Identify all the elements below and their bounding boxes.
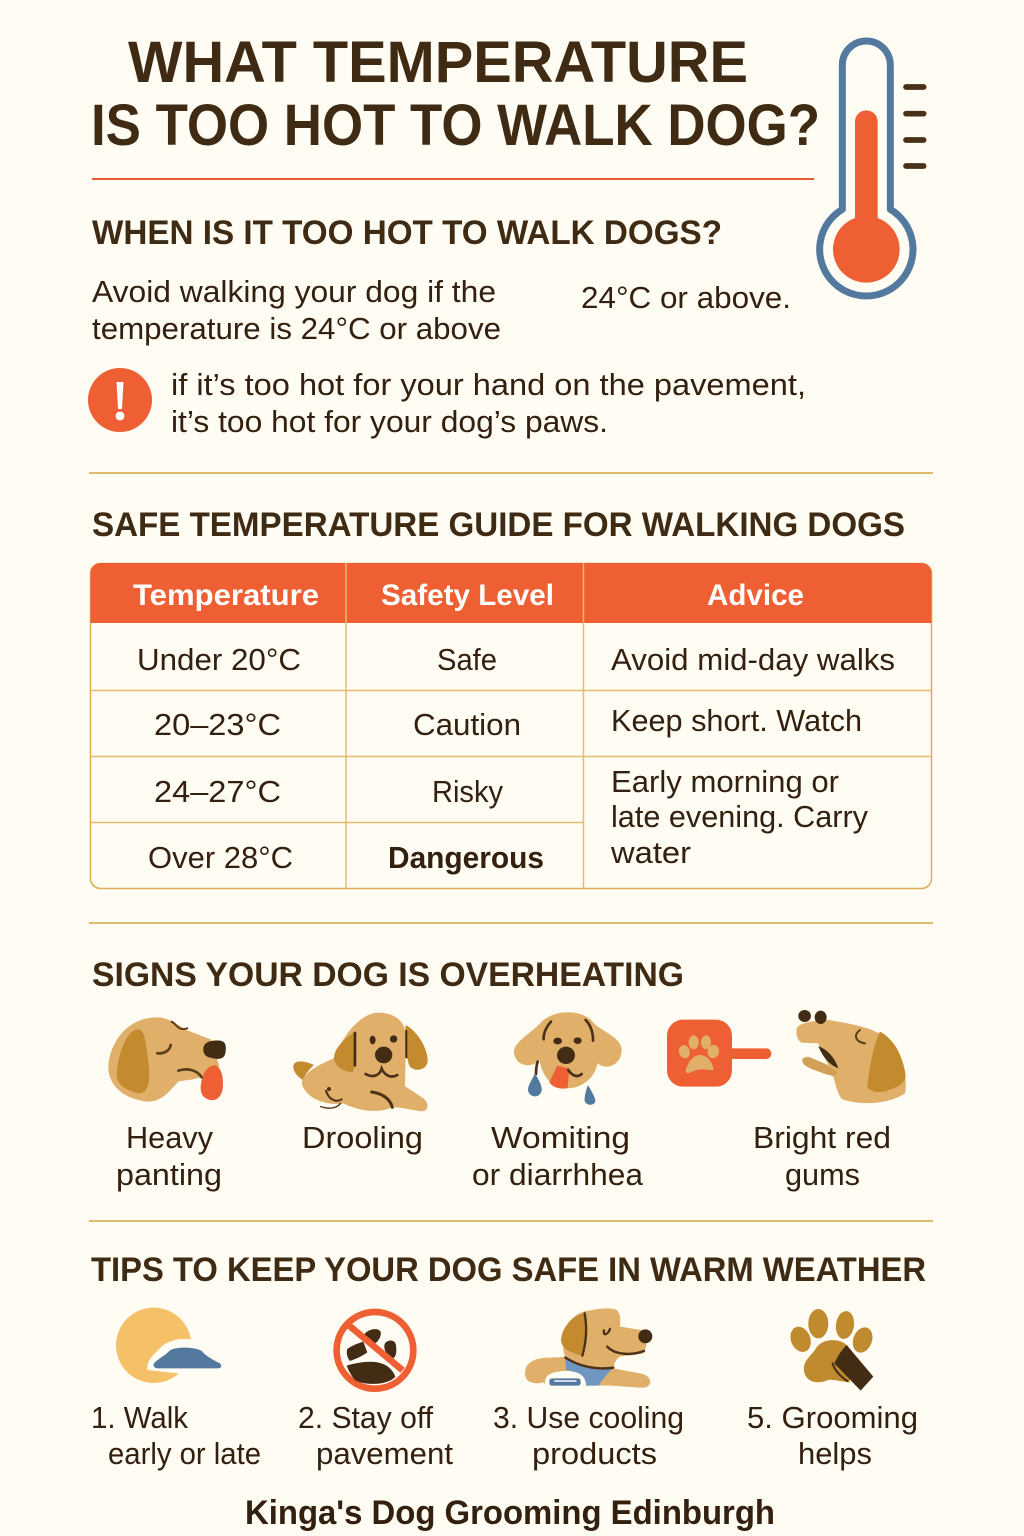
label: vomiting: or diarrhhea — [472, 1157, 644, 1192]
label: stay off pavement: 2. Stay off — [298, 1400, 433, 1435]
label: walk early or late — [91, 1400, 261, 1471]
label: walk early or late: early or late — [108, 1436, 261, 1471]
label: cooling products: 3. Use cooling — [493, 1400, 684, 1435]
footer: Kinga's Dog Grooming Edinburgh — [245, 1494, 775, 1532]
table: temperature guide — [90, 563, 932, 888]
text block: avoid walking: Avoid walking your dog if the — [92, 274, 496, 309]
icon: red gums dog — [796, 1010, 906, 1103]
label: bright red gums — [753, 1120, 891, 1192]
table: temperature guide: Safe — [437, 642, 497, 677]
text block: hand test: if it’s too hot for your hand on the pavement, — [171, 367, 806, 402]
label: stay off pavement: pavement — [316, 1436, 453, 1471]
label: heavy panting: panting — [116, 1157, 222, 1192]
label: bright red gums: Bright red — [753, 1120, 891, 1155]
icon: paw with grooming brush — [787, 1309, 876, 1391]
title: IS TOO HOT TO WALK DOG? — [91, 93, 820, 158]
table: temperature guide: Safety Level — [381, 579, 554, 612]
table: temperature guide: Caution — [413, 707, 521, 742]
text block: avoid walking — [92, 274, 501, 346]
label: bright red gums: gums — [785, 1157, 860, 1192]
table: temperature guide: late evening. Carry — [611, 799, 868, 834]
table: temperature guide: Temperature — [133, 579, 319, 612]
label: cooling products: products — [532, 1436, 657, 1471]
icon: dog with cooling vest — [525, 1308, 652, 1388]
text block: hand test — [171, 367, 806, 439]
icon: no pavement paw — [337, 1312, 413, 1389]
table: temperature guide: Under 20°C — [137, 642, 301, 677]
table: temperature guide: 24–27°C — [154, 774, 281, 809]
text block: hand test: it’s too hot for your dog’s paws. — [171, 404, 608, 439]
icon: warning — [88, 368, 152, 432]
table: temperature guide: Avoid mid-day walks — [611, 642, 895, 677]
table: temperature guide: water — [610, 835, 691, 870]
label: heavy panting — [116, 1120, 222, 1192]
label: walk early or late: 1. Walk — [91, 1400, 188, 1435]
label: grooming helps: helps — [798, 1436, 872, 1471]
label: vomiting — [472, 1120, 644, 1192]
icon: thermometer — [820, 41, 924, 296]
title — [91, 30, 820, 158]
label: drooling: Drooling — [302, 1120, 423, 1155]
icon: heavy panting dog — [108, 1017, 226, 1102]
icon: drooling dog — [293, 1013, 428, 1111]
table: temperature guide: Advice — [707, 579, 804, 612]
table: temperature guide: Keep short. Watch — [611, 703, 862, 738]
table: temperature guide: Over 28°C — [148, 840, 293, 875]
callout: 24C or above: 24°C or above. — [581, 280, 791, 315]
icon: vomiting dog — [514, 1012, 622, 1105]
table: temperature guide: Risky — [432, 774, 503, 809]
icon: red gums paw mirror — [667, 1020, 771, 1087]
table: temperature guide: Dangerous — [388, 840, 544, 875]
table: temperature guide: 20–23°C — [154, 707, 281, 742]
heading: tips: TIPS TO KEEP YOUR DOG SAFE IN WARM WEATHER — [91, 1251, 926, 1289]
heading: signs of overheating: SIGNS YOUR DOG IS OVERHEATING — [92, 956, 684, 994]
text block: avoid walking: temperature is 24°C or above — [92, 311, 501, 346]
label: grooming helps: 5. Grooming — [747, 1400, 918, 1435]
heading: when is it too hot: WHEN IS IT TOO HOT TO WALK DOGS? — [92, 214, 722, 252]
title: WHAT TEMPERATURE — [128, 30, 748, 95]
label: stay off pavement — [298, 1400, 453, 1471]
icon: sun and cloud — [116, 1308, 227, 1383]
table: temperature guide: Early morning or — [611, 764, 839, 799]
label: vomiting: Womiting — [491, 1120, 630, 1155]
label: grooming helps — [747, 1400, 918, 1471]
heading: safe temperature guide: SAFE TEMPERATURE GUIDE FOR WALKING DOGS — [92, 506, 905, 544]
label: heavy panting: Heavy — [126, 1120, 213, 1155]
label: cooling products — [493, 1400, 684, 1471]
